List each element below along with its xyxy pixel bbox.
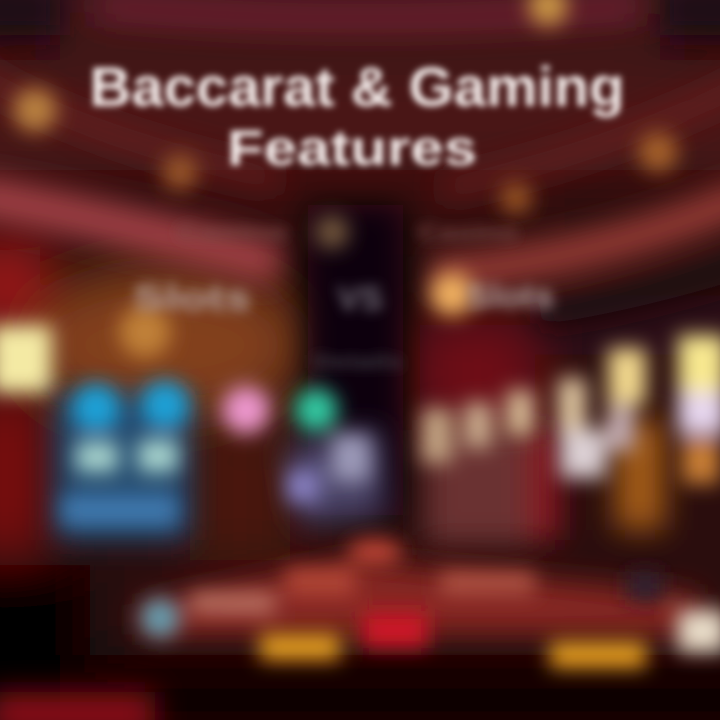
central dark column	[308, 205, 403, 515]
sub-labels	[133, 220, 554, 372]
sub-labels: Casino	[177, 220, 287, 245]
title: Baccarat & Gaming	[90, 55, 624, 118]
ceiling lights	[13, 0, 678, 358]
title: Features	[227, 120, 477, 176]
left glowing machine	[0, 325, 52, 393]
sub-labels: Slots	[466, 278, 554, 316]
sub-labels: VS	[337, 280, 383, 318]
sub-labels: Slots	[133, 277, 251, 318]
blue slot machines	[55, 381, 190, 540]
sub-labels: Details	[313, 352, 403, 372]
title	[90, 55, 624, 176]
pink and green machines	[222, 386, 385, 525]
red carpet	[0, 692, 155, 720]
ceiling bands	[0, 5, 720, 312]
sub-labels: Casino	[418, 220, 518, 245]
right slot machines	[422, 335, 720, 545]
front table	[140, 539, 720, 668]
